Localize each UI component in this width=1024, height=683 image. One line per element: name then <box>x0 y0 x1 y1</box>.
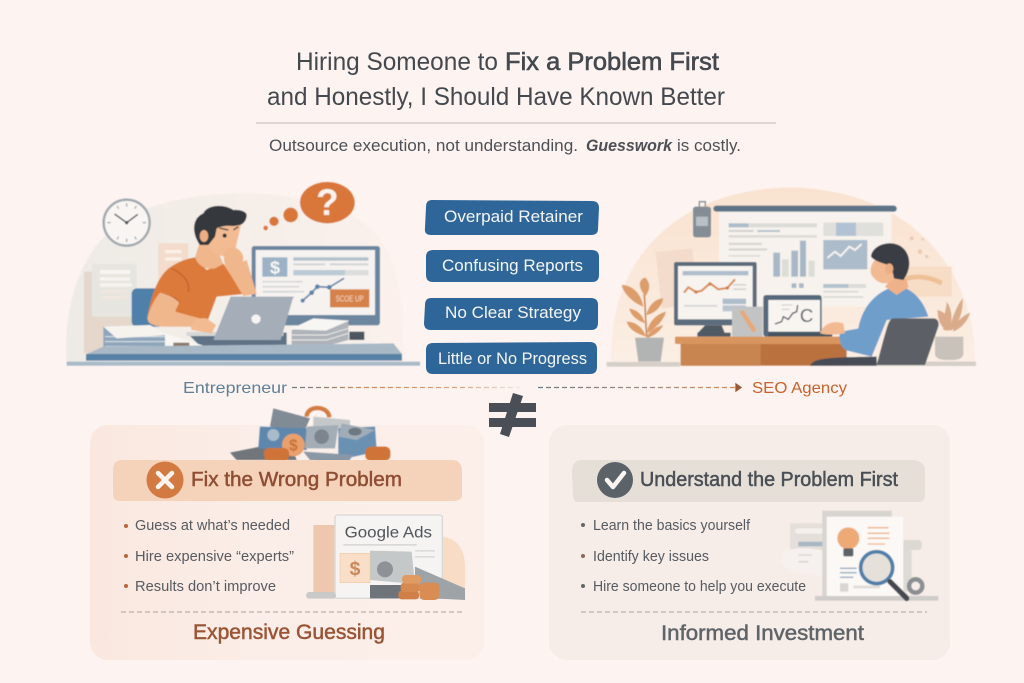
pill: no clear strategy <box>424 298 598 330</box>
icon: money pile <box>230 408 390 464</box>
plant right <box>935 298 970 360</box>
document holder <box>732 307 763 337</box>
pill: no clear strategy: No Clear Strategy <box>445 304 582 322</box>
title: Fix a Problem First <box>505 48 719 76</box>
footer: informed investment: Informed Investment <box>661 622 864 645</box>
bullet list: Learn the basics yourself <box>593 517 751 534</box>
monitor <box>252 246 380 325</box>
icon: wall clock <box>104 200 150 246</box>
monitor: SCOE UP <box>336 293 364 303</box>
footer: expensive guessing: Expensive Guessing <box>193 621 385 644</box>
pill: confusing reports: Confusing Reports <box>442 257 583 275</box>
icon: google ads card with money: Google Ads <box>345 524 432 541</box>
subtitle: is costly. <box>677 136 741 155</box>
icon: thought bubble with question mark: ? <box>316 182 339 223</box>
title <box>267 48 725 111</box>
plant left <box>622 277 666 362</box>
wall calendar <box>693 202 711 237</box>
heading: understand the problem first: Understand the Problem First <box>640 468 898 491</box>
icon: report with lightbulb and magnifier <box>781 511 938 601</box>
icon: thought bubble with question mark <box>263 182 355 230</box>
pill: overpaid retainer <box>425 200 599 235</box>
label: seo agency: SEO Agency <box>752 380 847 397</box>
icon: money pile: $ <box>289 438 298 455</box>
title: and Honestly, I Should Have Known Better <box>267 83 725 111</box>
heading: fix the wrong problem: Fix the Wrong Problem <box>191 468 402 491</box>
icon: x mark <box>146 462 184 498</box>
not equal sign <box>489 393 536 437</box>
paper stacks <box>103 318 372 353</box>
heading band <box>572 460 925 502</box>
subtitle: Outsource execution, not understanding. <box>269 136 578 155</box>
desk <box>675 337 847 366</box>
label: entrepreneur: Entrepreneur <box>183 380 288 397</box>
subtitle <box>269 136 741 155</box>
illustration: SEO agency at desk <box>607 187 976 367</box>
pill: confusing reports <box>426 250 599 282</box>
monitor: $ <box>270 257 280 277</box>
laptop with chart <box>763 295 832 337</box>
bullet list: Hire someone to help you execute <box>593 578 806 595</box>
man from behind with blue shirt <box>820 243 928 357</box>
chair <box>132 288 163 327</box>
bullet list: Identify key issues <box>593 548 709 565</box>
bullet list: Hire expensive “experts” <box>135 548 294 565</box>
pill: little or no progress <box>426 342 597 374</box>
arrow: dashed connector <box>292 384 741 391</box>
illustration: worried entrepreneur at desk <box>66 182 420 366</box>
panel: fix the wrong problem <box>90 408 484 660</box>
title: Hiring Someone to <box>296 48 498 76</box>
panel: understand the problem first <box>549 425 950 660</box>
office chair <box>810 318 939 366</box>
projection screen with report <box>713 206 897 307</box>
bullet list: Results don’t improve <box>135 578 276 595</box>
bullet list: Guess at what’s needed <box>135 517 290 534</box>
subtitle: Guesswork <box>586 136 673 155</box>
icon: google ads card with money: $ <box>350 559 361 580</box>
desk <box>67 343 420 366</box>
pill: overpaid retainer: Overpaid Retainer <box>444 208 584 226</box>
heading band <box>113 460 462 501</box>
bullet list <box>581 517 806 595</box>
pill: little or no progress: Little or No Progress <box>438 350 587 368</box>
icon: check mark <box>597 462 633 498</box>
icon: google ads card with money <box>306 515 465 600</box>
man: thinking <box>147 206 257 333</box>
laptop with chart: C <box>800 305 813 326</box>
laptop <box>187 297 293 346</box>
floor <box>607 362 976 367</box>
bullet list <box>124 517 294 595</box>
monitor with chart <box>674 262 757 337</box>
hand holding pen <box>191 318 216 333</box>
